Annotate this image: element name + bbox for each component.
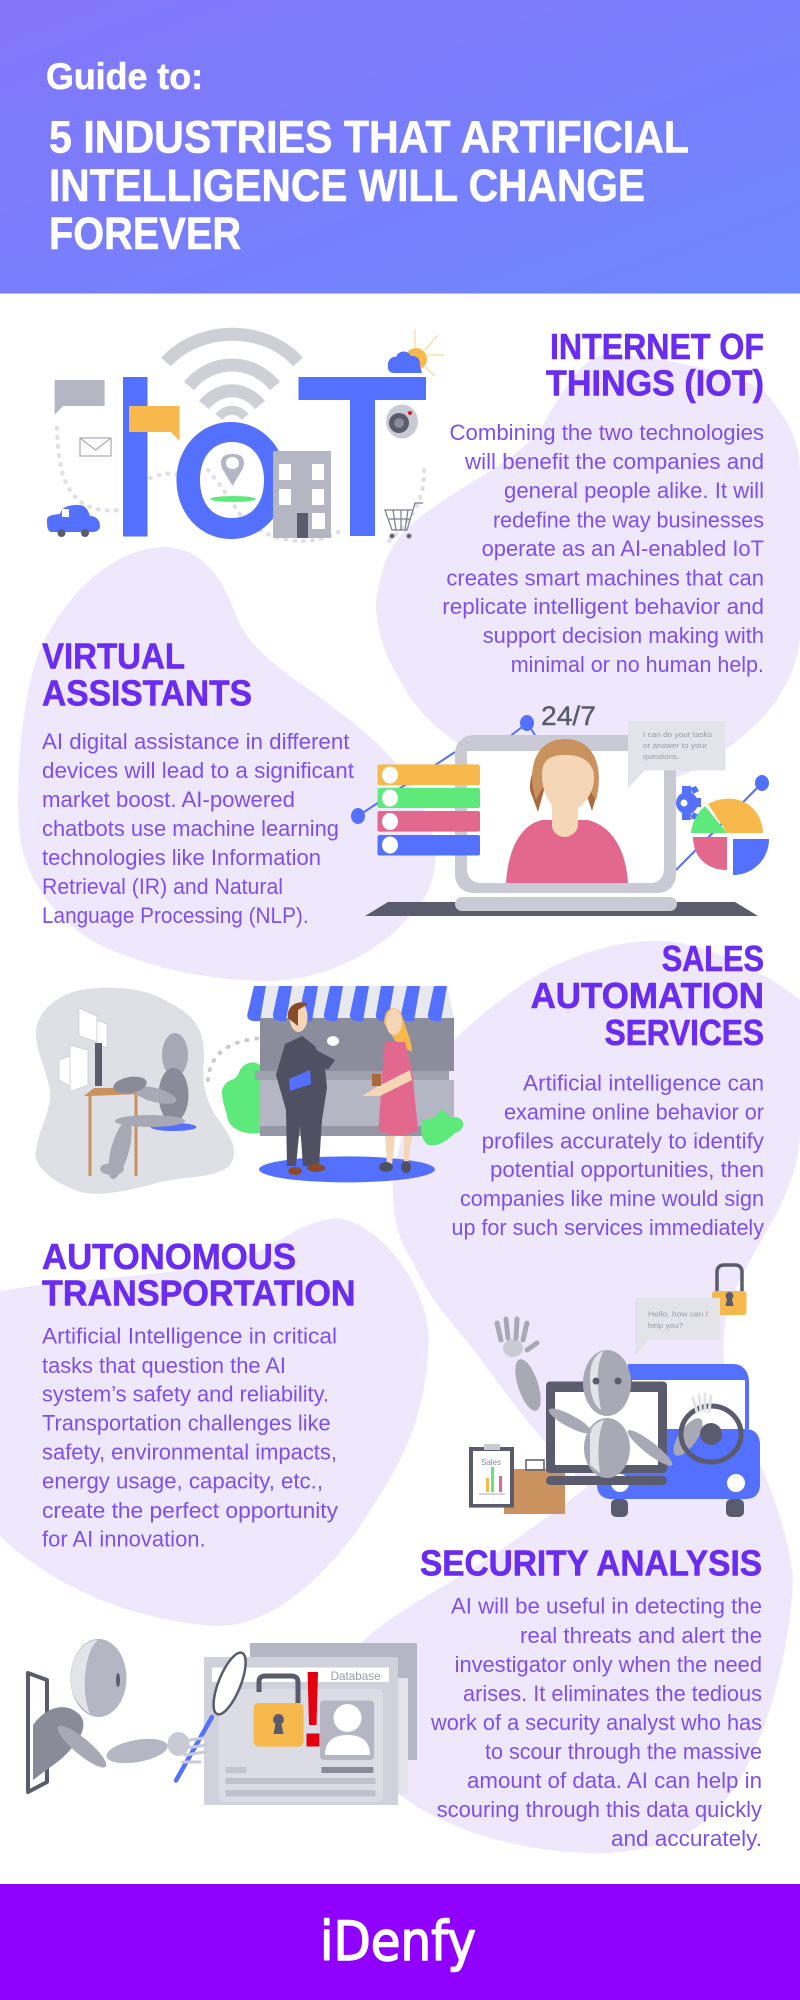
24/7 label: 24/7 <box>541 701 596 731</box>
heading: SALES <box>662 938 764 979</box>
speech bubble: or answer to your <box>643 741 708 750</box>
body text: will benefit the companies and <box>464 449 764 474</box>
body text: energy usage, capacity, etc., <box>42 1469 323 1494</box>
body text: tasks that question the AI <box>42 1353 286 1378</box>
body text: companies like mine would sign <box>460 1186 764 1211</box>
illustration: virtual assistant on laptop <box>351 701 769 916</box>
section: Internet of Things <box>442 326 764 677</box>
body text: creates smart machines that can <box>446 565 764 590</box>
woman in pink dress <box>362 1008 418 1173</box>
man in suit <box>276 1002 339 1175</box>
laptop screen <box>467 751 664 883</box>
user card <box>320 1700 374 1760</box>
body text <box>442 420 764 677</box>
body text <box>452 1070 764 1240</box>
magnifier and gripping hand <box>176 1649 252 1780</box>
gear <box>676 786 701 820</box>
illustration: IoT <box>47 329 444 545</box>
body text: technologies like Information <box>42 845 321 870</box>
section: Virtual Assistants <box>42 636 354 928</box>
body text: support decision making with <box>483 623 764 648</box>
pie chart <box>691 799 769 875</box>
title: FOREVER <box>49 208 241 259</box>
clipboard <box>469 1444 565 1514</box>
monitor <box>546 1382 667 1485</box>
heading: SECURITY ANALYSIS <box>420 1542 762 1583</box>
left plant <box>222 1062 262 1133</box>
body text: real threats and alert the <box>520 1623 762 1648</box>
illustration: robot inspecting database <box>28 1639 417 1805</box>
dotted connection paths <box>57 428 424 545</box>
desk <box>84 1088 140 1176</box>
heading <box>546 326 764 404</box>
heading <box>42 636 252 713</box>
body text: minimal or no human help. <box>511 652 764 677</box>
body text: arises. It eliminates the tedious <box>463 1681 762 1706</box>
shopping cart <box>385 503 423 538</box>
speech bubble: help you? <box>648 1321 683 1330</box>
body text: AI digital assistance in different <box>42 729 349 754</box>
body text: potential opportunities, then <box>490 1157 764 1182</box>
heading: INTERNET OF <box>550 326 764 367</box>
open padlock <box>254 1676 304 1747</box>
footer band <box>0 1884 800 2000</box>
body text: for AI innovation. <box>42 1526 206 1551</box>
speech bubble <box>635 1298 720 1356</box>
body text: Transportation challenges like <box>42 1410 331 1436</box>
body text: system’s safety and reliability. <box>42 1381 329 1406</box>
body text: Language Processing (NLP). <box>42 903 309 928</box>
body text: create the perfect opportunity <box>42 1498 338 1523</box>
letter I <box>123 377 148 536</box>
lock <box>712 1265 746 1315</box>
data rows <box>226 1767 376 1796</box>
body text: operate as an AI-enabled IoT <box>482 536 764 561</box>
body text <box>430 1594 762 1851</box>
green shadow <box>210 496 256 502</box>
heading: AUTOMATION <box>531 975 764 1016</box>
title: 5 INDUSTRIES THAT ARTIFICIAL <box>49 112 689 163</box>
body text: redefine the way businesses <box>493 507 764 532</box>
background blob: IoT <box>376 355 800 787</box>
header banner <box>0 0 800 294</box>
heading: ASSISTANTS <box>42 672 252 713</box>
truck <box>597 1364 760 1517</box>
envelope <box>80 438 111 456</box>
body text: investigator only when the need <box>455 1652 762 1677</box>
body text: profiles accurately to identify <box>482 1129 764 1154</box>
floating pages <box>59 1008 107 1092</box>
heading: TRANSPORTATION <box>42 1272 356 1313</box>
network line and nodes <box>351 715 769 870</box>
letter T <box>298 377 426 536</box>
body text: up for such services immediately <box>452 1215 764 1240</box>
awning <box>247 986 454 1021</box>
speech bubble: I can do your tasks <box>643 730 712 739</box>
shop <box>255 1017 454 1136</box>
colored list bars <box>378 764 480 856</box>
database window <box>204 1643 417 1805</box>
ground shadow <box>259 1156 435 1182</box>
body text: devices will lead to a significant <box>42 758 354 783</box>
robot working scene <box>35 988 262 1194</box>
building <box>273 451 331 538</box>
title: INTELLIGENCE WILL CHANGE <box>49 160 645 211</box>
laptop frame <box>455 735 676 893</box>
body text: market boost. AI-powered <box>42 787 295 812</box>
body text <box>42 1324 338 1551</box>
body text: general people alike. It will <box>504 478 764 503</box>
background blob: autonomous transportation <box>0 1218 429 1626</box>
security camera <box>386 404 418 438</box>
laptop base <box>365 902 758 916</box>
body text: to scour through the massive <box>485 1739 762 1764</box>
body text: Retrieval (IR) and Natural <box>42 874 283 899</box>
background blob: sales and security <box>354 941 800 1853</box>
heading: THINGS (IOT) <box>546 362 764 404</box>
body text: work of a security analyst who has <box>430 1710 762 1735</box>
body text: Combining the two technologies <box>450 420 764 445</box>
robot waving <box>497 1319 708 1478</box>
seated robot <box>100 1033 196 1181</box>
laptop trackpad <box>455 897 677 911</box>
illustration: robot at desk and shop <box>35 986 463 1194</box>
heading <box>42 1236 356 1313</box>
clipboard: Sales <box>481 1458 501 1467</box>
wifi signal arcs <box>166 334 298 417</box>
body text: amount of data. AI can help in <box>467 1768 762 1793</box>
gray backdrop <box>35 988 234 1194</box>
title <box>49 112 689 259</box>
heading: VIRTUAL <box>42 636 185 677</box>
robot body <box>28 1639 190 1792</box>
body text: and accurately. <box>611 1826 762 1851</box>
red exclamation mark <box>306 1672 320 1746</box>
speech bubble <box>628 721 726 788</box>
body text: Artificial Intelligence in critical <box>42 1324 337 1349</box>
steering wheel <box>681 1394 741 1462</box>
car <box>47 505 100 537</box>
body text: scouring through this data quickly <box>437 1797 762 1822</box>
body text: examine online behavior or <box>504 1100 764 1125</box>
body text: replicate intelligent behavior and <box>442 594 764 619</box>
dotted link <box>208 1038 262 1080</box>
logo: iDenfy: iDenfy <box>320 1910 476 1973</box>
speech bubble: questions. <box>643 752 679 761</box>
monitor <box>95 1043 102 1086</box>
section: Sales Automation Services <box>452 938 764 1240</box>
heading: SERVICES <box>605 1012 764 1053</box>
map pin <box>221 454 244 486</box>
person avatar <box>506 739 628 883</box>
section: Autonomous Transportation <box>42 1236 356 1551</box>
orange speech bubble <box>129 406 180 441</box>
body text: AI will be useful in detecting the <box>451 1594 762 1619</box>
sun and cloud <box>388 329 444 376</box>
body text: chatbots use machine learning <box>42 816 339 841</box>
heading: AUTONOMOUS <box>42 1236 296 1277</box>
body text: Artificial intelligence can <box>523 1070 764 1096</box>
illustration: robot driving truck <box>469 1265 760 1517</box>
body text <box>42 729 354 928</box>
right plant <box>421 1110 463 1145</box>
background blob: virtual assistants <box>18 547 435 981</box>
gray speech bubble <box>55 380 105 415</box>
speech bubble: Hello, how can I <box>648 1310 708 1319</box>
body text: safety, environmental impacts, <box>42 1440 337 1465</box>
kicker: Guide to: Guide to: <box>46 56 203 97</box>
heading <box>531 938 764 1053</box>
section: Security Analysis <box>420 1542 762 1851</box>
database label: Database <box>331 1669 381 1683</box>
letter O <box>176 422 286 539</box>
